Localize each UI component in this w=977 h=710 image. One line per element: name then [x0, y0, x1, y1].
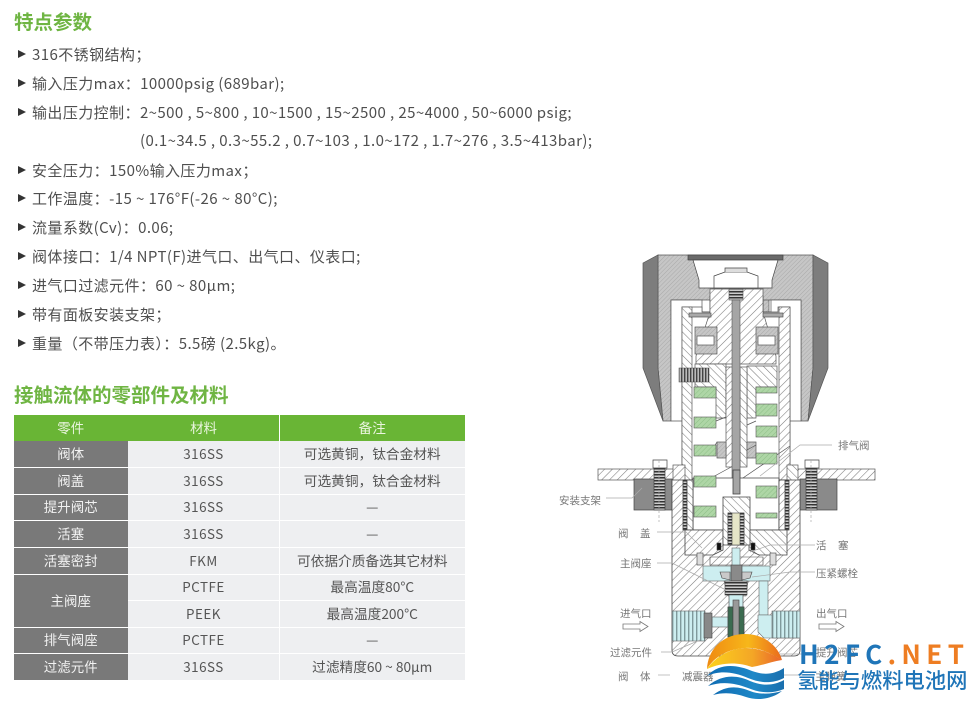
materials table: 可选黄铜，钛合金材料 [304, 470, 441, 490]
materials table: PCTFE [182, 576, 225, 596]
diagram labels: 主阀座 [620, 556, 652, 571]
materials table: 过滤精度60 ~ 80μm [312, 656, 432, 676]
spec: output pressure in bar: (0.1~34.5 , 0.3~55.2 , 0.7~103 , 1.0~172 , 1.7~276 , 3.5~413bar); [140, 130, 592, 151]
diagram labels: 提升阀芯 [816, 645, 858, 660]
diagram labels: 阀 [618, 526, 628, 541]
green piston springs [694, 387, 777, 464]
diagram labels: 压紧螺栓 [816, 566, 858, 581]
materials table: — [366, 629, 378, 649]
bearings [689, 313, 783, 354]
row: filter element: 过滤元件 [44, 656, 98, 676]
materials table: 可依据介质备选其它材料 [297, 550, 448, 570]
spec: temperature: 工作温度：-15 ~ 176°F(-26 ~ 80°C); [32, 188, 278, 209]
spec list [18, 44, 592, 354]
diagram labels: 阀 [618, 669, 628, 684]
table header: part: 零件 [57, 416, 84, 436]
spec: ports: 阀体接口：1/4 NPT(F)进气口、出气口、仪表口; [32, 246, 361, 267]
row: piston: 活塞 [57, 523, 84, 543]
outlet arrow [819, 622, 844, 632]
diagram labels [559, 438, 870, 684]
spec: output pressure: 输出压力控制：2~500 , 5~800 , 10~1500 , 15~2500 , 25~4000 , 50~6000 psig; [32, 102, 572, 123]
row: bonnet: 阀盖 [57, 470, 84, 490]
diagram labels: 主弹簧 [815, 669, 846, 684]
diagram labels: 安装支架 [559, 493, 601, 508]
knob cap [688, 255, 783, 288]
diagram labels: 排气阀 [838, 438, 870, 453]
row: main seat PEEK [128, 600, 279, 626]
materials table: 316SS [183, 523, 224, 543]
materials table: 316SS [183, 443, 224, 463]
row: valve body [14, 441, 128, 466]
leader lines [606, 445, 832, 675]
row: piston seal [14, 548, 128, 574]
fluid passages [672, 548, 800, 641]
diagram labels: 减震器 [682, 669, 714, 684]
heading: features: 特点参数 [14, 6, 92, 35]
mounting panel [598, 469, 875, 480]
row: main seat [14, 574, 128, 626]
row: vent seat: 排气阀座 [44, 629, 98, 649]
diagram labels: 过滤元件 [610, 645, 652, 660]
heading: wetted parts and materials: 接触流体的零部件及材料 [14, 379, 229, 408]
materials table: 316SS [183, 656, 224, 676]
row: piston seal: 活塞密封 [44, 550, 98, 570]
materials table: 可选黄铜，钛合金材料 [304, 443, 441, 463]
table header: material: 材料 [190, 416, 217, 436]
materials table: — [366, 523, 378, 543]
materials table: 316SS [183, 470, 224, 490]
set screw [679, 368, 709, 382]
spec: bracket: 带有面板安装支架； [32, 304, 171, 325]
materials table: FKM [189, 550, 218, 570]
row: poppet: 提升阀芯 [44, 496, 98, 516]
spec: safety pressure: 安全压力：150%输入压力max； [32, 160, 258, 181]
table header: note: 备注 [359, 416, 386, 436]
filter element [704, 613, 712, 638]
row: piston [14, 521, 128, 546]
inlet arrow [623, 622, 648, 632]
table header: part [14, 414, 128, 440]
materials table: 最高温度200°C [327, 602, 418, 622]
diagram labels: 塞 [838, 538, 849, 553]
adjustment knob [643, 255, 828, 421]
materials table: 最高温度80°C [330, 576, 414, 596]
spring housing [673, 289, 798, 485]
diagram labels: 盖 [640, 526, 651, 541]
spec: material: 316不锈钢结构； [32, 44, 151, 65]
row: valve body: 阀体 [57, 443, 84, 463]
logo text: H2FC.NET: H2FC.NET [799, 635, 969, 672]
diagram labels: 体 [640, 669, 651, 684]
materials table: — [366, 496, 378, 516]
logo: sun and waves [707, 634, 784, 699]
materials table: 316SS [183, 496, 224, 516]
spec: filter: 进气口过滤元件：60 ~ 80μm; [32, 275, 235, 296]
mounting bracket blocks [634, 460, 837, 510]
table header: material [128, 414, 279, 440]
row: bonnet [14, 468, 128, 494]
row: main seat: 主阀座 [50, 590, 91, 610]
diagram labels: 出气口 [816, 606, 848, 621]
materials table [14, 415, 465, 680]
spec: flow coefficient: 流量系数(Cv)：0.06; [32, 217, 174, 238]
table header: note [280, 414, 465, 440]
logo text: Chinese site name: 氢能与燃料电池网 [797, 664, 967, 695]
row: main seat PEEK: PEEK [186, 602, 221, 622]
valve body [672, 470, 800, 656]
spec: weight: 重量（不带压力表）：5.5磅 (2.5kg)。 [32, 333, 286, 354]
row: filter element [14, 654, 128, 680]
seals and piston details [697, 543, 776, 565]
materials table: PCTFE [182, 629, 225, 649]
row: poppet [14, 494, 128, 520]
spec: input pressure: 输入压力max：10000psig (689bar); [32, 73, 285, 94]
central stem [729, 289, 743, 492]
diagram labels: 活 [816, 538, 827, 553]
valve poppet and springs [720, 513, 752, 637]
row: vent seat [14, 628, 128, 653]
diagram labels: 进气口 [620, 606, 652, 621]
